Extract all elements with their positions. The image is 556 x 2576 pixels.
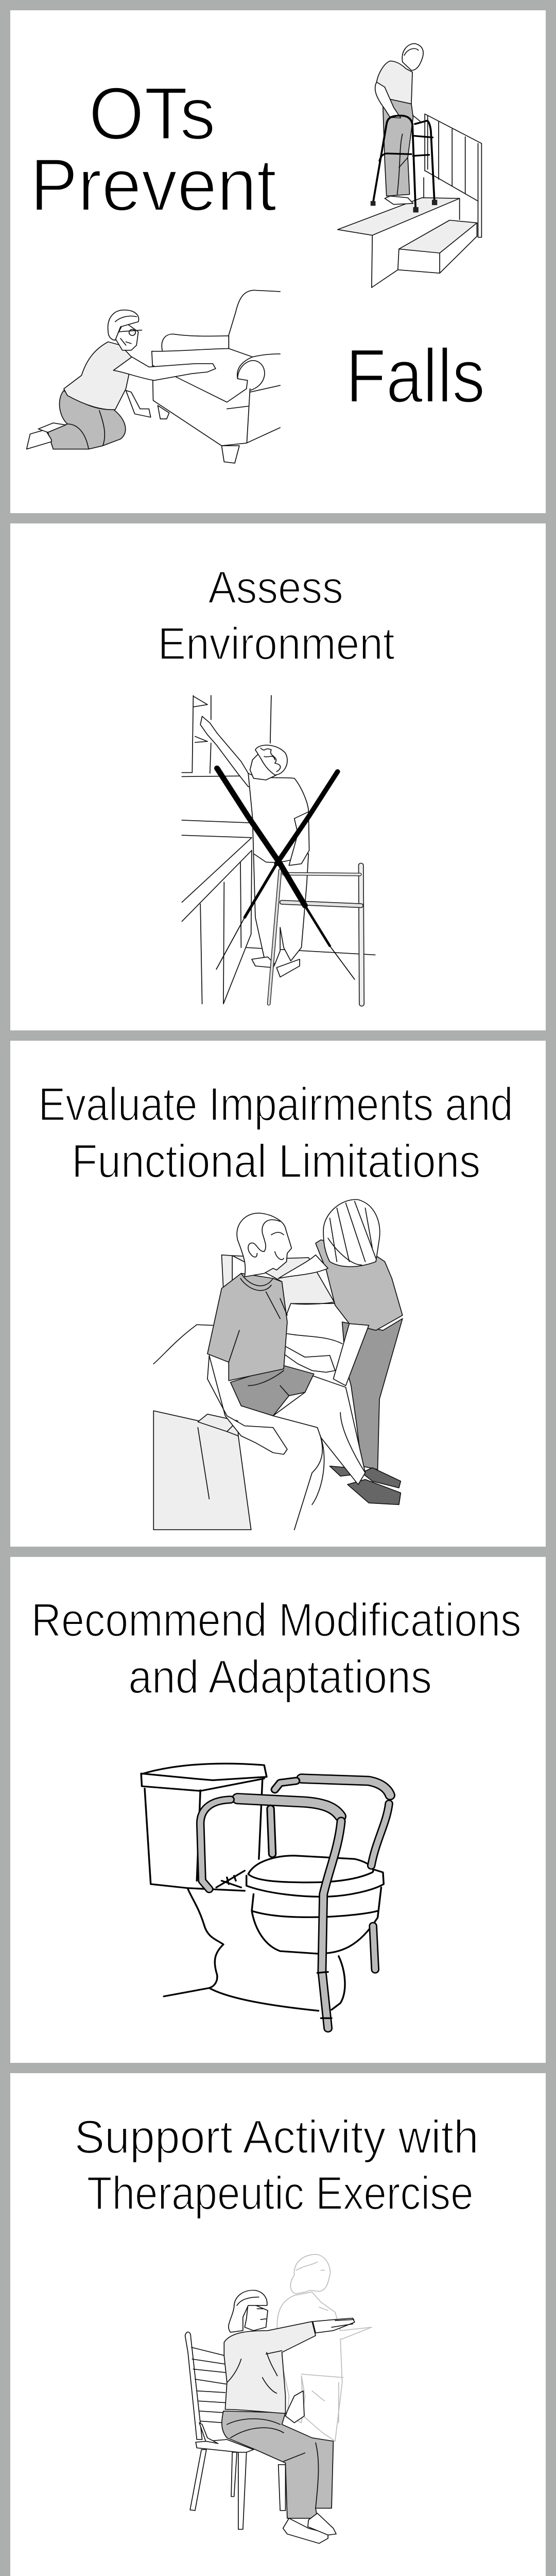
illustration: man with walker on steps	[338, 44, 481, 287]
heading: Assess Environment: Environment	[158, 619, 395, 669]
illustration: woman reaching up to high shelf with walker, crossed out	[182, 696, 375, 1004]
title: Falls: Falls	[346, 334, 485, 419]
panel: OTs Prevent Falls	[10, 10, 546, 513]
title: OTs Prevent: OTs	[89, 72, 216, 155]
illustration: chair	[185, 2332, 285, 2529]
heading: Support Activity with Therapeutic Exercise: Therapeutic Exercise	[87, 2167, 474, 2219]
heading: Evaluate Impairments and Functional Limitations	[38, 1078, 513, 1187]
illustration: toilet with safety rails	[141, 1764, 390, 2028]
illustration: woman on floor pulling up on sofa	[27, 290, 280, 463]
illustration: standing ghost figure	[277, 2255, 372, 2441]
heading: Assess Environment: Assess	[208, 563, 343, 613]
heading: Support Activity with Therapeutic Exercise: Support Activity with	[75, 2110, 479, 2163]
heading: Assess Environment	[158, 563, 395, 669]
heading: Support Activity with Therapeutic Exercise	[75, 2110, 479, 2219]
panel: Support Activity with Therapeutic Exercise	[10, 2073, 546, 2576]
icon: hand-drawn X	[216, 768, 355, 979]
title: OTs Prevent	[30, 72, 276, 227]
title: OTs Prevent: Prevent	[30, 143, 276, 227]
panel: Assess Environment	[10, 523, 546, 1030]
heading: Recommend Modifications and Adaptations: and Adaptations	[128, 1651, 432, 1703]
panel: Recommend Modifications and Adaptations	[10, 1557, 546, 2063]
illustration: therapist assisting seated man at bedside	[153, 1199, 403, 1530]
panel: Evaluate Impairments and Functional Limitations	[10, 1041, 546, 1547]
heading: Recommend Modifications and Adaptations	[31, 1594, 522, 1703]
illustration: seated woman raising arms	[222, 2290, 355, 2544]
heading: Evaluate Impairments and Functional Limitations: Functional Limitations	[72, 1134, 480, 1187]
